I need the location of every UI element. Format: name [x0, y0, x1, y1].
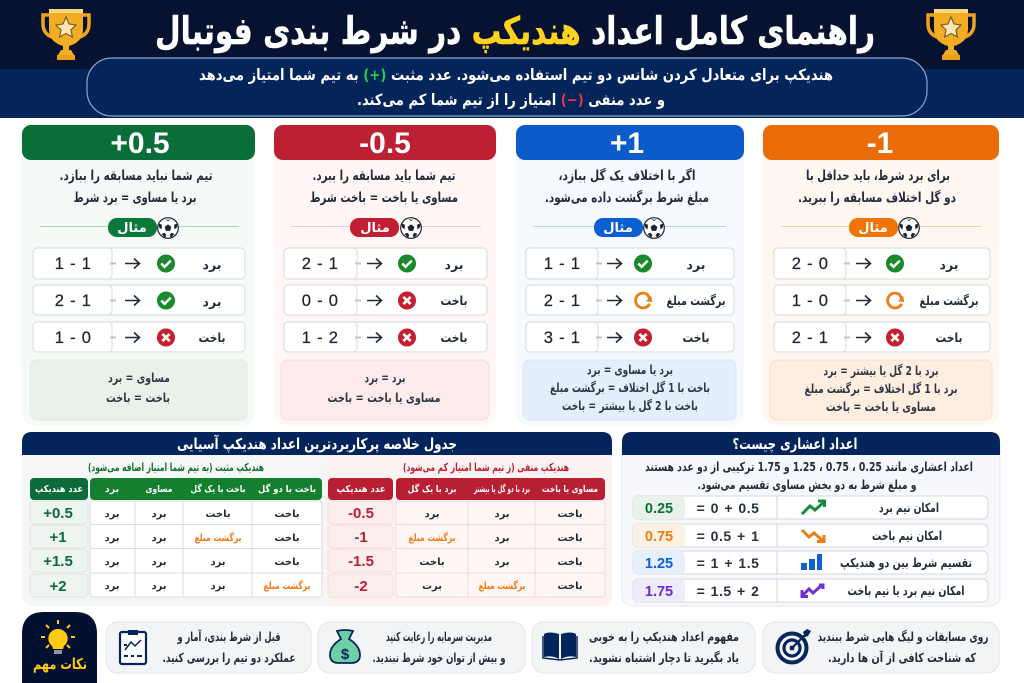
decimal row 0.75: = 0.5 + 1	[697, 528, 759, 544]
positive handicap table: برد	[151, 581, 167, 592]
example row 2: برگشت مبلغ	[666, 293, 726, 308]
example row 1: برد	[940, 257, 958, 272]
summary +0.5	[30, 360, 247, 420]
decimal row 0.75: امکان نیم باخت	[872, 528, 942, 543]
intro callout	[87, 58, 927, 116]
example row 3	[33, 322, 245, 352]
positive handicap table: +2	[49, 578, 67, 595]
positive handicap table: برد	[151, 509, 167, 520]
negative handicap table	[328, 461, 605, 597]
example row 3	[284, 322, 487, 352]
example row 1: 2 - 0	[792, 255, 828, 273]
example row 2: 2 - 1	[544, 292, 580, 310]
negative handicap table: برت	[422, 581, 442, 592]
tip text: عملکرد دو تیم را بررسی کنید.	[162, 650, 296, 665]
example row 2: برد	[203, 294, 221, 309]
decimal row 1.25	[633, 551, 988, 574]
tip text	[372, 629, 506, 665]
decimal row 1.75: 1.75	[645, 584, 673, 600]
negative handicap table: باخت	[557, 557, 583, 568]
tip text: مدیریت سرمایه را رعایت کنید	[386, 629, 492, 644]
negative handicap table: باخت	[419, 557, 445, 568]
example badge -0.5	[291, 218, 481, 238]
header band	[0, 0, 1024, 118]
example row 1: 2 - 1	[302, 255, 338, 273]
example row 2	[774, 285, 990, 315]
negative handicap table: برد	[424, 509, 440, 520]
description -0.5: مساوی یا باخت = باخت شرط	[310, 190, 458, 206]
positive handicap table: برد	[210, 557, 226, 568]
description -1: دو گل اختلاف مسابقه را ببرید.	[798, 189, 956, 206]
negative handicap table: برد	[494, 533, 510, 544]
icon: clipboard chart	[120, 630, 146, 664]
example row 2	[33, 285, 245, 315]
decimal row 0.75: 0.75	[645, 529, 673, 545]
positive handicap table: باخت	[274, 557, 300, 568]
description +0.5	[60, 168, 212, 206]
panel: -0.5	[274, 125, 496, 425]
tip text	[162, 629, 296, 665]
positive handicap table: مساوی	[146, 484, 173, 495]
tip text: مفهوم اعداد هندیکپ را به خوبی	[589, 629, 739, 645]
decimal row 0.25: امکان نیم برد	[879, 500, 939, 515]
example row 1	[33, 248, 245, 279]
negative handicap table: باخت	[557, 581, 583, 592]
heading: +1: +1	[610, 127, 644, 160]
example row 3: باخت	[440, 330, 468, 345]
negative handicap table: -1.5	[348, 553, 374, 570]
tip: bankroll	[318, 622, 525, 673]
tip text: یاد بگیرید تا دچار اشتباه نشوید.	[589, 650, 739, 665]
negative handicap table: برد	[494, 557, 510, 568]
description -1: برای برد شرط، باید حداقل با	[806, 168, 950, 184]
title: راهنمای کامل اعداد هندیکپ در شرط بندی فوتبال	[155, 9, 875, 53]
positive handicap table: +0.5	[43, 505, 73, 522]
decimal row 1.25: = 1 + 1.5	[697, 555, 759, 571]
summary +1: برد یا مساوی = برد	[587, 362, 673, 377]
table heading	[22, 432, 612, 455]
positive handicap table: +1.5	[43, 553, 73, 570]
icon: trophy right	[928, 9, 974, 60]
description +1	[545, 167, 709, 206]
example row 2: 1 - 0	[792, 292, 828, 310]
panel: decimal numbers	[622, 432, 1000, 606]
example badge -0.5: مثال	[360, 221, 390, 236]
example row 3: 2 - 1	[792, 329, 828, 347]
intro callout: هندیکپ برای متعادل کردن شانس دو تیم استفاده می‌شود. عدد مثبت (+) به تیم شما امتیاز می‌دهد	[199, 66, 833, 85]
description +0.5: تیم شما نباید مسابقه را ببازد.	[60, 168, 212, 184]
positive handicap table: برد	[151, 557, 167, 568]
negative handicap table: برد با دو گل یا بیشتر	[473, 483, 530, 495]
heading: +0.5	[22, 125, 255, 160]
example badge +1	[533, 218, 726, 238]
example badge +1: مثال	[603, 221, 633, 236]
panel: +0.5	[22, 125, 255, 425]
decimal heading: اعداد اعشاری چیست؟	[732, 435, 858, 454]
description +1: مبلغ شرط برگشت داده می‌شود.	[545, 189, 709, 206]
example row 1: 1 - 1	[544, 255, 580, 273]
tip: analysis	[106, 622, 311, 673]
tip text	[818, 629, 988, 665]
example row 2: برگشت مبلغ	[920, 293, 978, 308]
negative handicap table: برگشت مبلغ	[408, 531, 456, 544]
tip text: قبل از شرط بندی، آمار و	[177, 629, 280, 644]
decimal description: و مبلغ شرط به دو بخش مساوی تقسیم می‌شود.	[698, 477, 916, 492]
positive handicap table: برد	[210, 581, 226, 592]
heading: -1	[763, 125, 999, 160]
example row 3: 1 - 0	[55, 329, 91, 347]
table heading: جدول خلاصه پرکاربردترین اعداد هندیکپ آسیایی	[177, 435, 457, 454]
positive handicap table: برگشت مبلغ	[194, 531, 242, 544]
decimal row 1.75: = 1.5 + 2	[697, 583, 759, 599]
decimal row 0.75	[633, 524, 988, 547]
summary +1	[523, 360, 736, 420]
tip text: که شناخت کافی از آن ها دارید.	[828, 650, 977, 665]
example row 2	[284, 285, 487, 315]
decimal row 1.25: 1.25	[645, 556, 673, 572]
heading: -0.5: -0.5	[359, 127, 411, 160]
summary +0.5: مساوی = برد	[108, 370, 170, 385]
positive handicap table: برد	[105, 484, 119, 495]
heading: +0.5: +0.5	[110, 127, 170, 160]
negative handicap table: -1	[354, 529, 368, 546]
example row 3: باخت	[198, 330, 226, 345]
positive handicap table: باخت	[274, 509, 300, 520]
decimal row 1.75: امکان نیم برد یا نیم باخت	[848, 583, 964, 598]
example badge +0.5	[40, 218, 239, 238]
example row 3	[774, 322, 990, 352]
positive handicap table	[30, 461, 322, 597]
decimal heading	[622, 432, 1000, 455]
positive handicap table: برد	[104, 509, 120, 520]
positive handicap table: برد	[104, 533, 120, 544]
negative handicap table: باخت	[557, 509, 583, 520]
summary -0.5: مساوی یا باخت = باخت	[328, 390, 440, 405]
negative handicap table: باخت	[557, 533, 583, 544]
heading: +1	[516, 125, 744, 160]
example row 3	[526, 322, 734, 352]
heading: -1: -1	[867, 127, 893, 160]
example badge +0.5: مثال	[117, 221, 147, 236]
example row 2: 0 - 0	[302, 292, 338, 310]
summary -0.5: برد = برد	[364, 370, 406, 385]
tip: known leagues	[763, 622, 999, 673]
positive handicap table: عدد هندیکپ	[35, 484, 83, 495]
panel: summary table	[22, 432, 612, 606]
summary -0.5	[281, 360, 489, 420]
description -0.5	[310, 168, 458, 206]
example row 1: برد	[203, 257, 221, 272]
positive handicap table: باخت با دو گل	[258, 483, 316, 495]
icon: money bag	[330, 630, 360, 663]
summary +1: باخت با 2 گل یا بیشتر = باخت	[562, 398, 698, 413]
positive handicap table: هندیکپ مثبت (به تیم شما امتیاز اضافه می‌شود)	[88, 461, 264, 474]
example badge -1: مثال	[858, 221, 888, 236]
panel: -1	[763, 125, 999, 425]
positive handicap table: +1	[49, 529, 67, 546]
heading: -0.5	[274, 125, 496, 160]
negative handicap table: عدد هندیکپ	[336, 484, 386, 495]
negative handicap table: -2	[354, 578, 368, 595]
description -0.5: تیم شما باید مسابقه را ببرد.	[312, 168, 456, 184]
icon: trophy left	[43, 9, 89, 60]
example row 3: 1 - 2	[302, 329, 338, 347]
example row 2	[526, 285, 734, 315]
positive handicap table: برد	[104, 581, 120, 592]
panel: important tips tab	[22, 612, 97, 683]
summary -1: مساوی یا باخت = باخت	[826, 399, 936, 414]
example row 3: 3 - 1	[544, 329, 580, 347]
example row 2: باخت	[440, 293, 468, 308]
negative handicap table: برد با یک گل	[408, 483, 456, 495]
decimal description: اعداد اعشاری مانند 0.25 ، 0.75 ، 1.25 و 1.75 ترکیبی از دو عدد هستند	[645, 459, 973, 474]
example row 3: باخت	[936, 330, 962, 345]
intro callout: و عدد منفی (−) امتیاز را از تیم شما کم می‌کند.	[357, 91, 665, 109]
decimal row 1.75	[633, 579, 988, 602]
negative handicap table: برد	[494, 509, 510, 520]
summary -1: برد با 1 گل اختلاف = برگشت مبلغ	[804, 381, 958, 396]
positive handicap table: باخت با یک گل	[190, 483, 246, 495]
summary -1	[770, 360, 992, 420]
tip text: و بیش از توان خود شرط نبندید.	[372, 650, 506, 665]
description +1: اگر با اختلاف یک گل ببازد،	[558, 167, 696, 184]
example row 1: برد	[445, 257, 463, 272]
decimal row 0.25: 0.25	[645, 501, 673, 517]
negative handicap table: مساوی یا باخت	[542, 484, 598, 495]
example row 1	[774, 248, 990, 279]
decimal description	[645, 459, 973, 492]
description +0.5: برد یا مساوی = برد شرط	[74, 190, 196, 206]
example row 1	[526, 248, 734, 279]
tip: learn handicap	[532, 622, 755, 673]
decimal row 0.25	[633, 496, 988, 519]
positive handicap table: برد	[104, 557, 120, 568]
icon: open book	[543, 632, 577, 660]
negative handicap table: -0.5	[348, 505, 374, 522]
icon: light bulb	[41, 620, 75, 654]
summary +1: باخت با 1 گل اختلاف = برگشت مبلغ	[550, 380, 710, 395]
example row 3: باخت	[682, 330, 710, 345]
example row 1: 1 - 1	[55, 255, 91, 273]
negative handicap table: برگشت مبلغ	[478, 579, 526, 592]
example badge -1	[781, 218, 981, 238]
example row 2: 2 - 1	[55, 292, 91, 310]
summary +0.5: باخت = باخت	[106, 390, 170, 405]
panel: important tips tab: نکات مهم	[33, 655, 87, 673]
positive handicap table: باخت	[274, 533, 300, 544]
positive handicap table: برد	[151, 533, 167, 544]
positive handicap table: باخت	[205, 509, 231, 520]
description -1	[798, 168, 956, 206]
positive handicap table: برگشت مبلغ	[264, 579, 310, 592]
summary -1: برد با 2 گل یا بیشتر = برد	[823, 363, 938, 378]
negative handicap table: هندیکپ منفی (ز تیم شما امتیاز کم می‌شود)	[403, 461, 569, 474]
icon: money bag: $	[341, 646, 350, 663]
decimal row 1.25: تقسیم شرط بین دو هندیکپ	[840, 555, 972, 570]
panel: +1	[516, 125, 744, 425]
example row 1: برد	[687, 257, 705, 272]
tip text	[589, 629, 739, 665]
icon: target	[778, 629, 811, 662]
example row 1	[284, 248, 487, 279]
decimal row 0.25: = 0 + 0.5	[697, 500, 759, 516]
